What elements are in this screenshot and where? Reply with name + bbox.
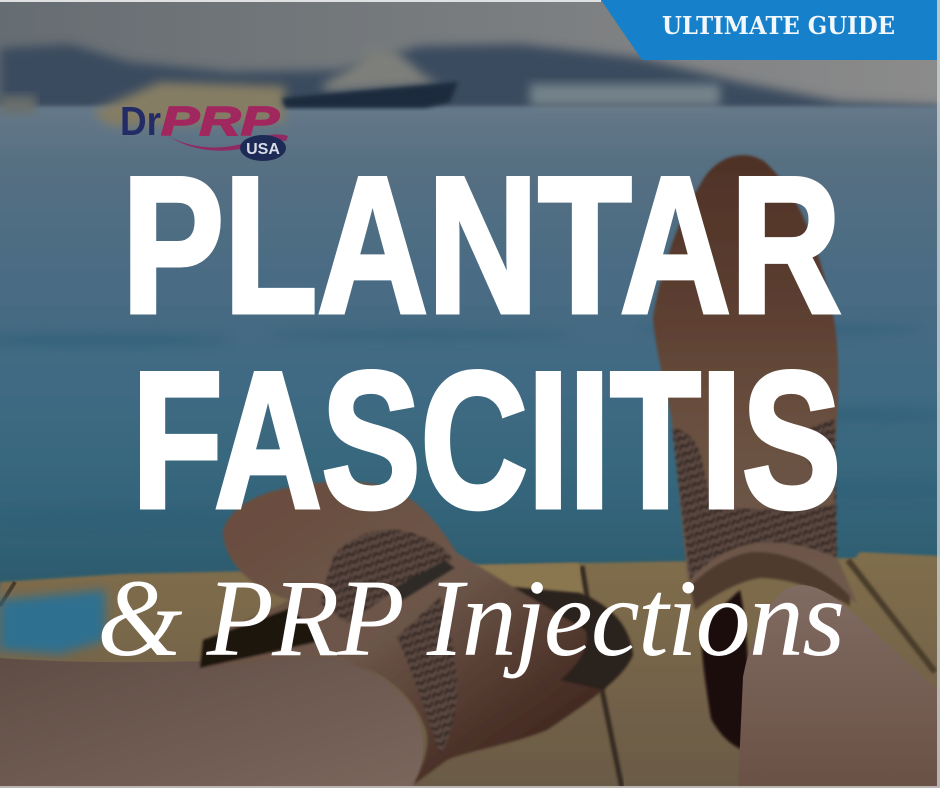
water bbox=[0, 106, 940, 586]
subtitle: & PRP Injections: & PRP Injections bbox=[97, 557, 845, 679]
logo USA badge bbox=[240, 135, 286, 161]
wooden deck bbox=[0, 552, 940, 788]
left leg bbox=[0, 655, 423, 788]
banner: Ultimate Guide: ULTIMATE GUIDE bbox=[662, 11, 895, 40]
right leg bbox=[738, 585, 940, 788]
logo swoosh bbox=[170, 134, 288, 151]
right boot bbox=[653, 155, 857, 751]
banner: Ultimate Guide bbox=[601, 0, 937, 60]
logo: Dr PRP USA bbox=[120, 98, 288, 161]
moored boats bbox=[0, 48, 720, 126]
left boot bbox=[200, 481, 633, 785]
logo: Dr PRP USA: USA bbox=[246, 141, 280, 158]
water ripples bbox=[0, 324, 940, 530]
sky bbox=[0, 0, 940, 120]
logo: Dr PRP USA: PRP bbox=[161, 98, 280, 144]
distant hills bbox=[0, 44, 940, 120]
logo wordmark: Dr bbox=[120, 98, 161, 144]
